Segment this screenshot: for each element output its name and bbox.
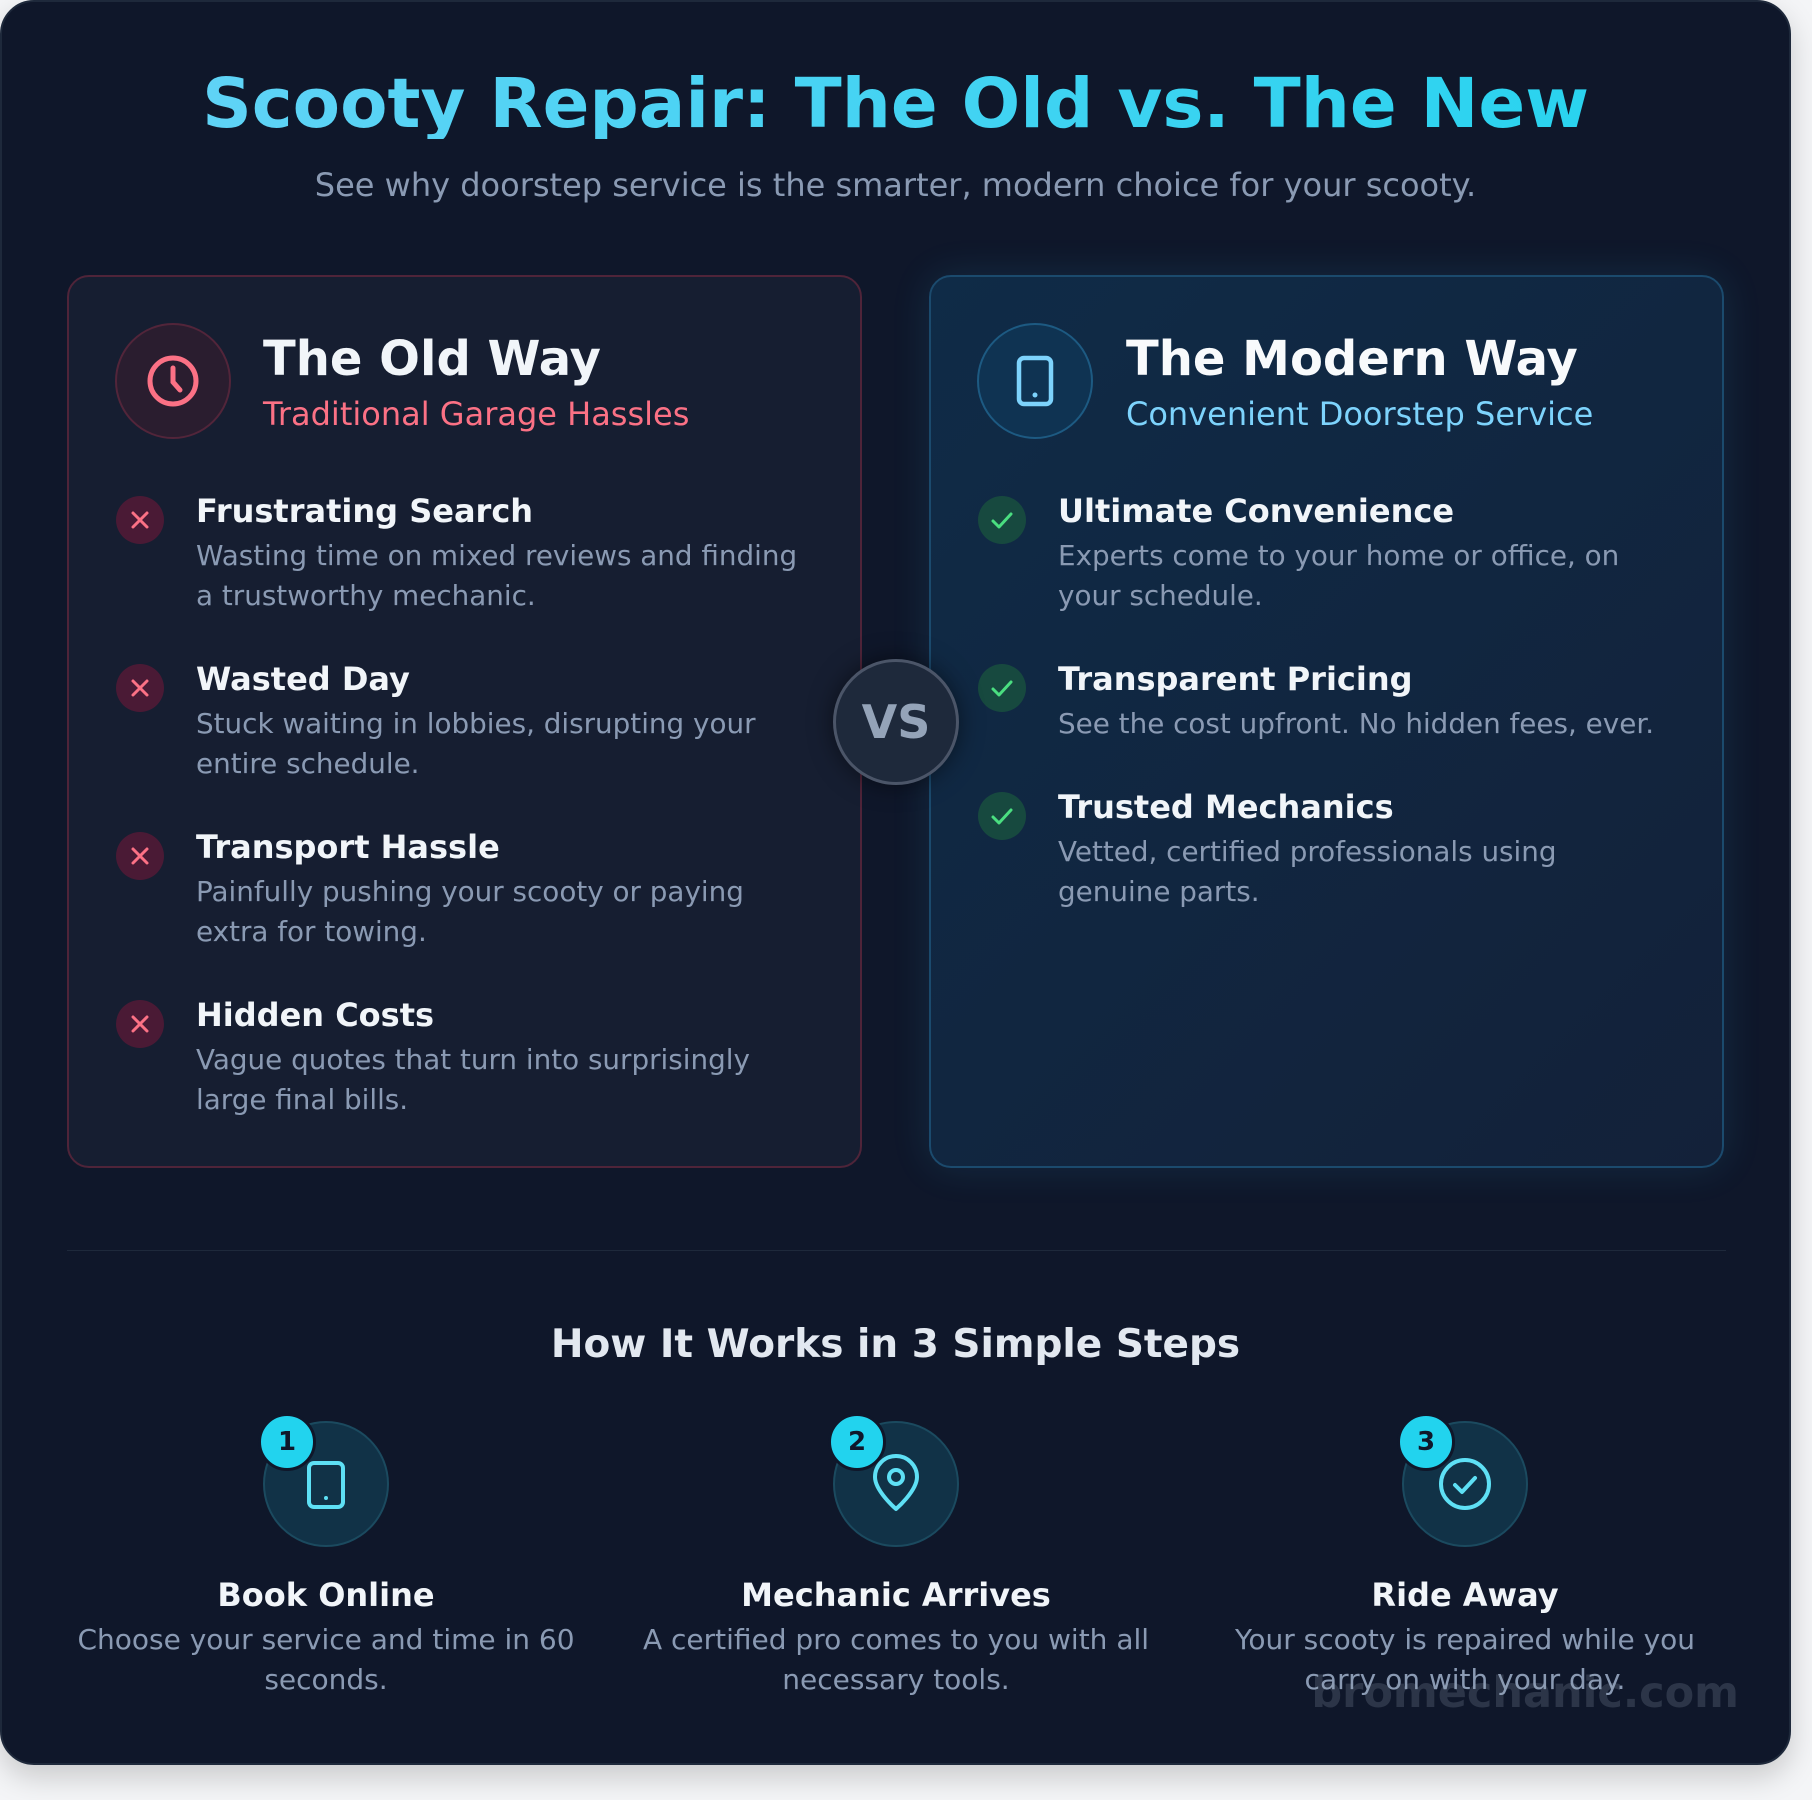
watermark: bromechanic.com [1311,1668,1739,1718]
heading: modern way: The Modern Way [1126,331,1578,387]
item: wasted day [116,660,756,780]
item: transparent pricing: See the cost upfront. No hidden fees, ever. [1058,707,1654,740]
item: ultimate convenience: Experts come to your home or office, on your schedule. [1058,539,1619,612]
subheading: old way: Traditional Garage Hassles [263,395,689,433]
step 2: mechanic arrives: Mechanic Arrives [741,1576,1051,1614]
step 3: ride away [1235,1416,1695,1696]
badge 1 [258,1413,316,1471]
vs badge [833,659,959,785]
step 1: book online: Book Online [217,1576,435,1614]
item: wasted day: Stuck waiting in lobbies, disrupting your entire schedule. [196,707,756,780]
subtitle: See why doorstep service is the smarter, modern choice for your scooty. [315,166,1476,204]
item: transport hassle: Transport Hassle [196,828,500,866]
title [0,70,1791,139]
icon: phone step [263,1421,389,1547]
item: hidden costs: Vague quotes that turn into surprisingly large final bills. [196,1043,750,1116]
item: hidden costs: Hidden Costs [196,996,434,1034]
item: ultimate convenience: Ultimate Convenience [1058,492,1454,530]
item: trusted mechanics: Vetted, certified professionals using genuine parts. [1058,835,1557,908]
item: transport hassle [116,828,744,948]
item: ultimate convenience [978,492,1619,612]
item: transparent pricing: Transparent Pricing [1058,660,1413,698]
badge 2 [828,1413,886,1471]
item: trusted mechanics [978,788,1557,908]
item: wasted day: Wasted Day [196,660,410,698]
icon: check circle [1402,1421,1528,1547]
icon: location pin [833,1421,959,1547]
icon: clock [115,323,231,439]
title: Scooty Repair: The Old vs. The New [202,64,1589,144]
icon: phone [977,323,1093,439]
subheading: modern way: Convenient Doorstep Service [1126,395,1593,433]
panel: modern way [929,275,1724,1168]
step 3: ride away: Your scooty is repaired while you carry on with your day. [1235,1623,1695,1696]
step 3: ride away: Ride Away [1371,1576,1559,1614]
item: frustrating search: Frustrating Search [196,492,533,530]
vs badge: VS [862,695,930,749]
section heading: how it works: How It Works in 3 Simple Steps [551,1322,1240,1367]
item: transparent pricing [978,660,1654,740]
item: hidden costs [116,996,750,1116]
item: transport hassle: Painfully pushing your scooty or paying extra for towing. [196,875,744,948]
step 2: mechanic arrives: A certified pro comes to you with all necessary tools. [643,1623,1149,1696]
panel: old way [67,275,862,1168]
item: frustrating search: Wasting time on mixed reviews and finding a trustworthy mechanic. [196,539,797,612]
heading: old way: The Old Way [263,331,601,387]
badge 3: 3 [1417,1427,1435,1457]
badge 2: 2 [848,1427,866,1457]
step 1: book online [77,1416,575,1696]
step 1: book online: Choose your service and time in 60 seconds. [77,1623,575,1696]
item: trusted mechanics: Trusted Mechanics [1058,788,1394,826]
badge 1: 1 [278,1427,296,1457]
step 2: mechanic arrives [643,1416,1149,1696]
badge 3 [1397,1413,1455,1471]
item: frustrating search [116,492,797,612]
